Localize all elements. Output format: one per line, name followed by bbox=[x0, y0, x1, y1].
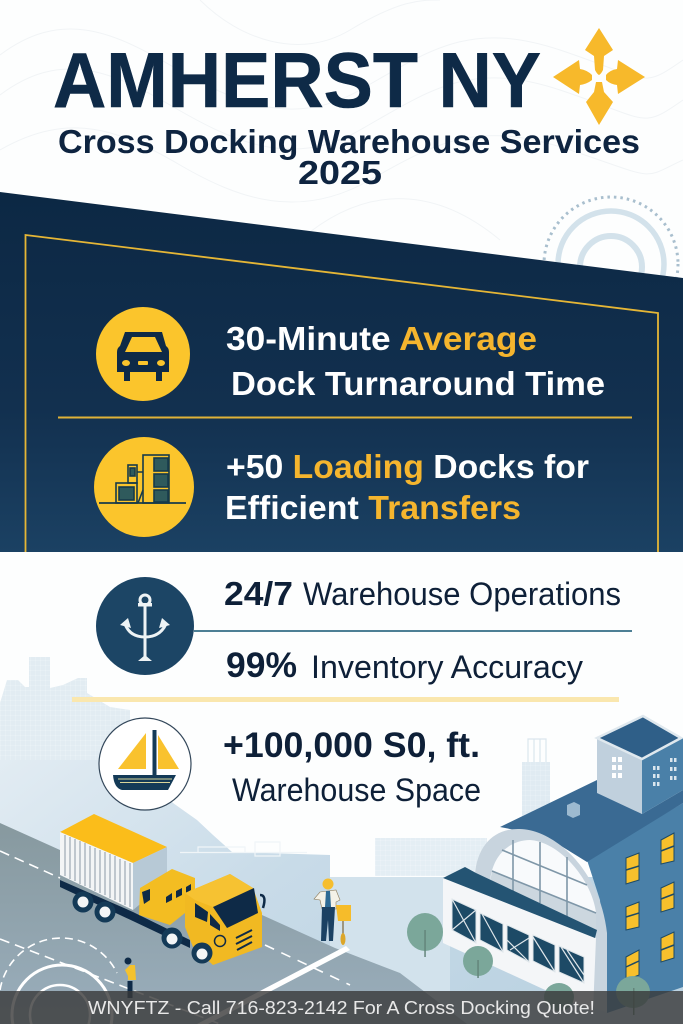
icon: warehouse stack badge bbox=[94, 437, 194, 537]
text: dock turnaround metric bbox=[226, 320, 605, 402]
subtitle bbox=[58, 123, 640, 191]
icon: sailboat badge bbox=[99, 718, 191, 810]
text: dock turnaround metric: Dock Turnaround Time bbox=[231, 365, 605, 402]
landscape ground bbox=[0, 760, 683, 1024]
text: warehouse space: Warehouse Space bbox=[232, 772, 481, 808]
divider bbox=[58, 416, 632, 418]
subtitle: 2025 bbox=[298, 154, 382, 191]
icon: car badge bbox=[96, 307, 190, 401]
text: warehouse operations: Warehouse Operations bbox=[303, 576, 621, 612]
divider bbox=[72, 697, 619, 702]
illustration: engineer with hard hat bbox=[314, 878, 351, 945]
text: loading docks metric bbox=[225, 448, 589, 526]
footer banner: WNYFTZ - Call 716-823-2142 For A Cross Docking Quote! bbox=[88, 998, 595, 1018]
text: dock turnaround metric: 30-Minute Average bbox=[226, 320, 537, 357]
subtitle: Cross Docking Warehouse Services bbox=[58, 123, 640, 160]
illustration: warehouse building bbox=[443, 716, 683, 1013]
road bbox=[0, 823, 467, 1024]
text: warehouse space bbox=[223, 726, 481, 808]
icon: anchor badge bbox=[96, 577, 194, 675]
icon: gold compass arrows bbox=[553, 28, 645, 125]
text: warehouse space: +100,000 S0, ft. bbox=[223, 726, 480, 765]
divider bbox=[194, 630, 632, 632]
text: inventory accuracy: Inventory Accuracy bbox=[311, 649, 583, 685]
city skyline background bbox=[0, 657, 550, 822]
panel: navy key metrics bbox=[0, 192, 683, 552]
text: warehouse operations: 24/7 bbox=[224, 575, 293, 612]
illustration: cargo truck bbox=[60, 814, 264, 965]
text: loading docks metric: +50 Loading Docks for bbox=[226, 448, 589, 485]
text: inventory accuracy: 99% bbox=[226, 646, 297, 685]
trees bbox=[407, 913, 650, 1015]
footer banner bbox=[0, 991, 683, 1024]
illustration: worker with hi-vis vest bbox=[124, 958, 136, 998]
text: inventory accuracy bbox=[226, 646, 583, 685]
title: AMHERST NY bbox=[53, 36, 541, 124]
icon: decorative concentric arcs bbox=[544, 197, 678, 331]
text: loading docks metric: Efficient Transfers bbox=[225, 489, 521, 526]
